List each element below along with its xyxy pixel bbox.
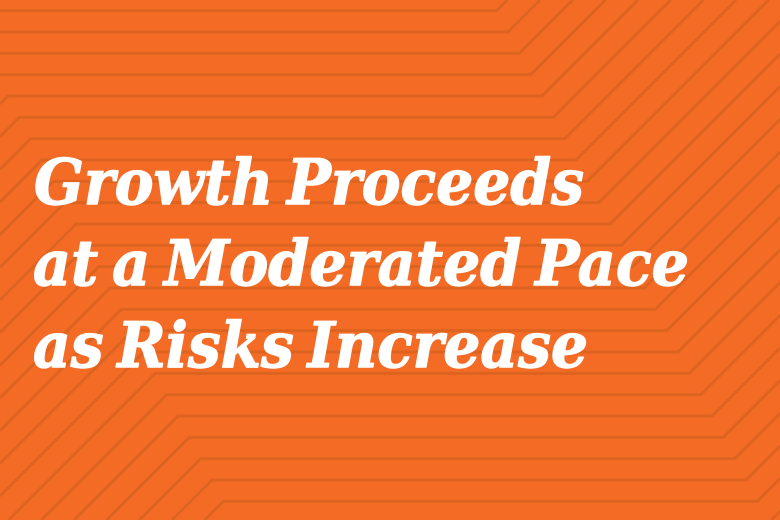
title: as Risks Increase <box>33 308 588 382</box>
title <box>33 145 689 382</box>
title: Growth Proceeds <box>34 145 584 219</box>
title: at a Moderated Pace <box>33 226 689 300</box>
